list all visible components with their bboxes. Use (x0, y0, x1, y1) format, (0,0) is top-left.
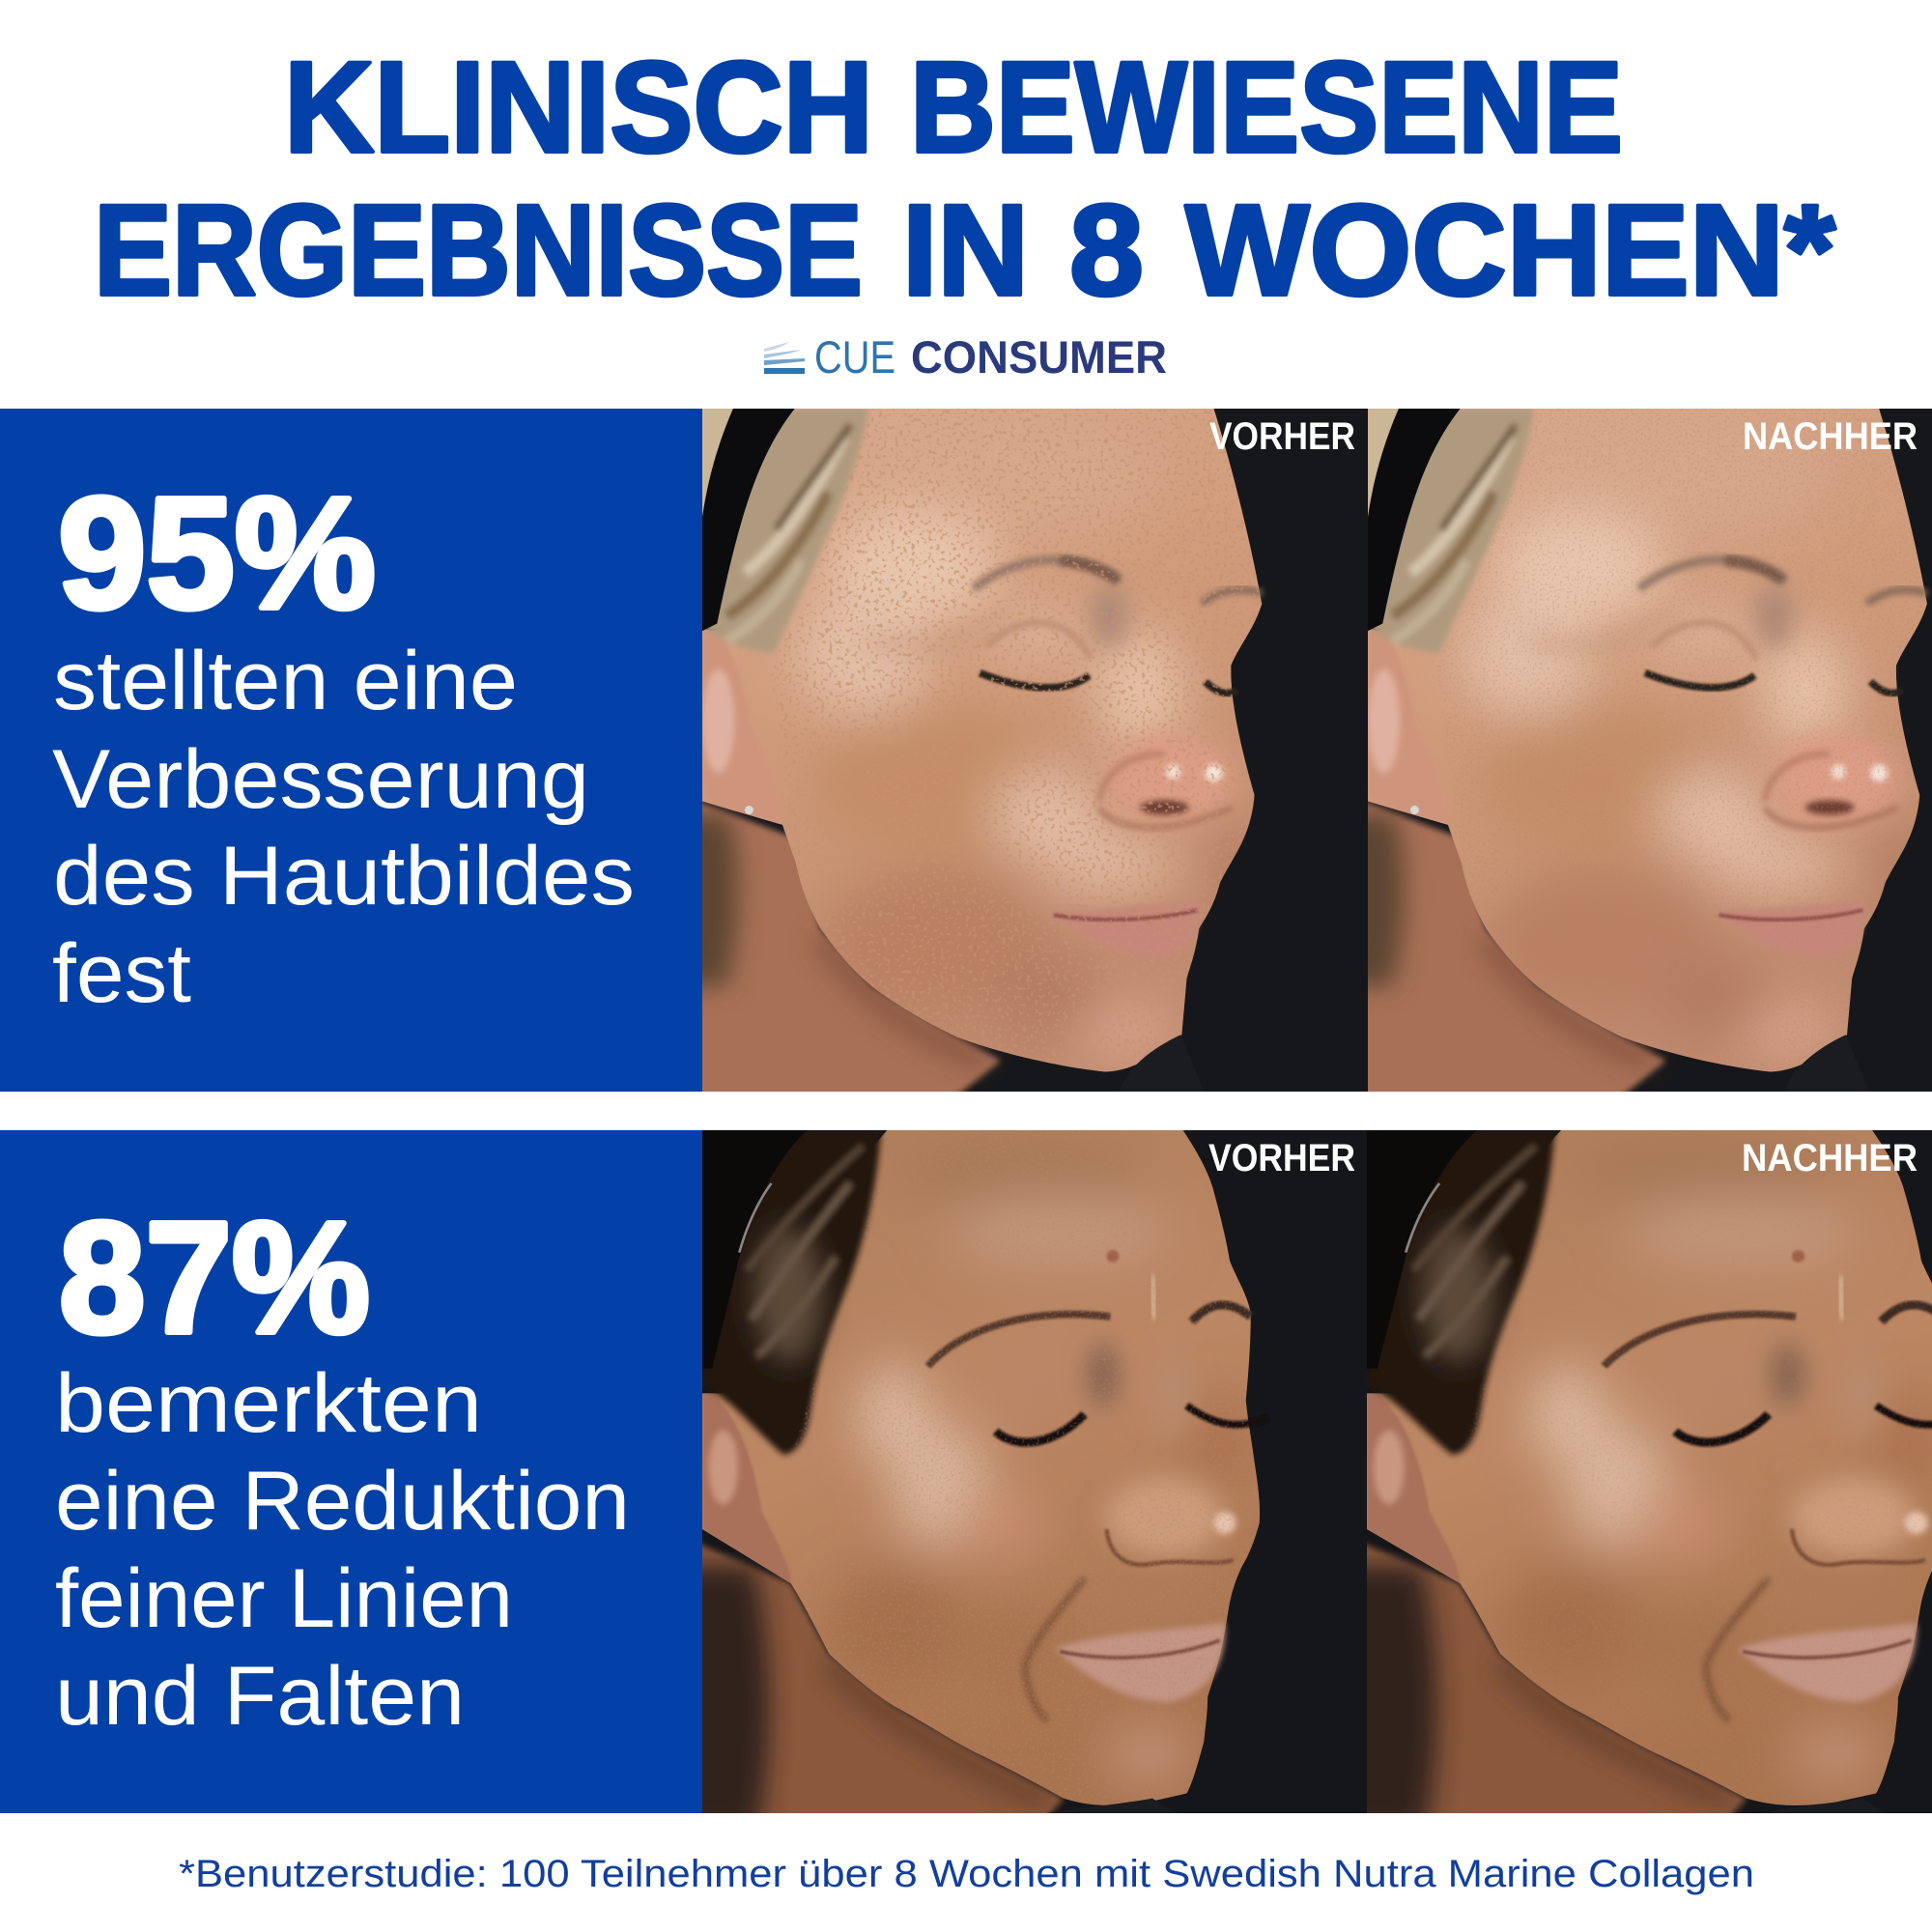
title: ERGEBNISSE (94, 179, 863, 323)
photo: after, smoother face (1368, 409, 1932, 1092)
photo: before, dark-haired face (702, 1130, 1367, 1813)
icon: logo stripes (764, 342, 805, 374)
footnote: *Benutzerstudie: 100 Teilnehmer über 8 Wochen mit Swedish Nutra Marine Collagen (179, 1853, 1754, 1895)
description text: Verbesserung (52, 733, 589, 826)
title: IN (902, 179, 1029, 323)
description text: stellten eine (53, 635, 518, 727)
logo: Cue Consumer (764, 331, 1167, 383)
description text: des Hautbildes (53, 830, 635, 923)
description text: und Falten (55, 1650, 465, 1743)
description text: eine Reduktion (55, 1455, 630, 1548)
stat number: 87%: 87% (59, 1189, 370, 1366)
title (94, 36, 1836, 323)
stat number: 95%: 95% (58, 465, 376, 641)
description text (55, 1357, 630, 1743)
description text: bemerkten (55, 1357, 482, 1450)
panel: 95% statistic (0, 409, 702, 1092)
panel: 87% statistic (0, 1130, 702, 1813)
label: before: VORHER (1209, 415, 1355, 458)
photo: before, freckled face (702, 409, 1368, 1092)
title: WOCHEN* (1185, 179, 1836, 323)
photo: after, dark-haired face (1367, 1130, 1932, 1813)
title: 8 (1069, 179, 1144, 323)
label: after: NACHHER (1742, 1137, 1918, 1179)
title: BEWIESENE (910, 36, 1623, 180)
logo: Cue Consumer: CONSUMER (911, 331, 1167, 383)
description text: feiner Linien (55, 1552, 513, 1645)
title: KLINISCH (284, 36, 873, 180)
label: after: NACHHER (1743, 415, 1918, 458)
label: before: VORHER (1208, 1137, 1355, 1179)
description text: fest (52, 927, 191, 1020)
description text (52, 635, 635, 1020)
logo: Cue Consumer: CUE (814, 331, 895, 383)
